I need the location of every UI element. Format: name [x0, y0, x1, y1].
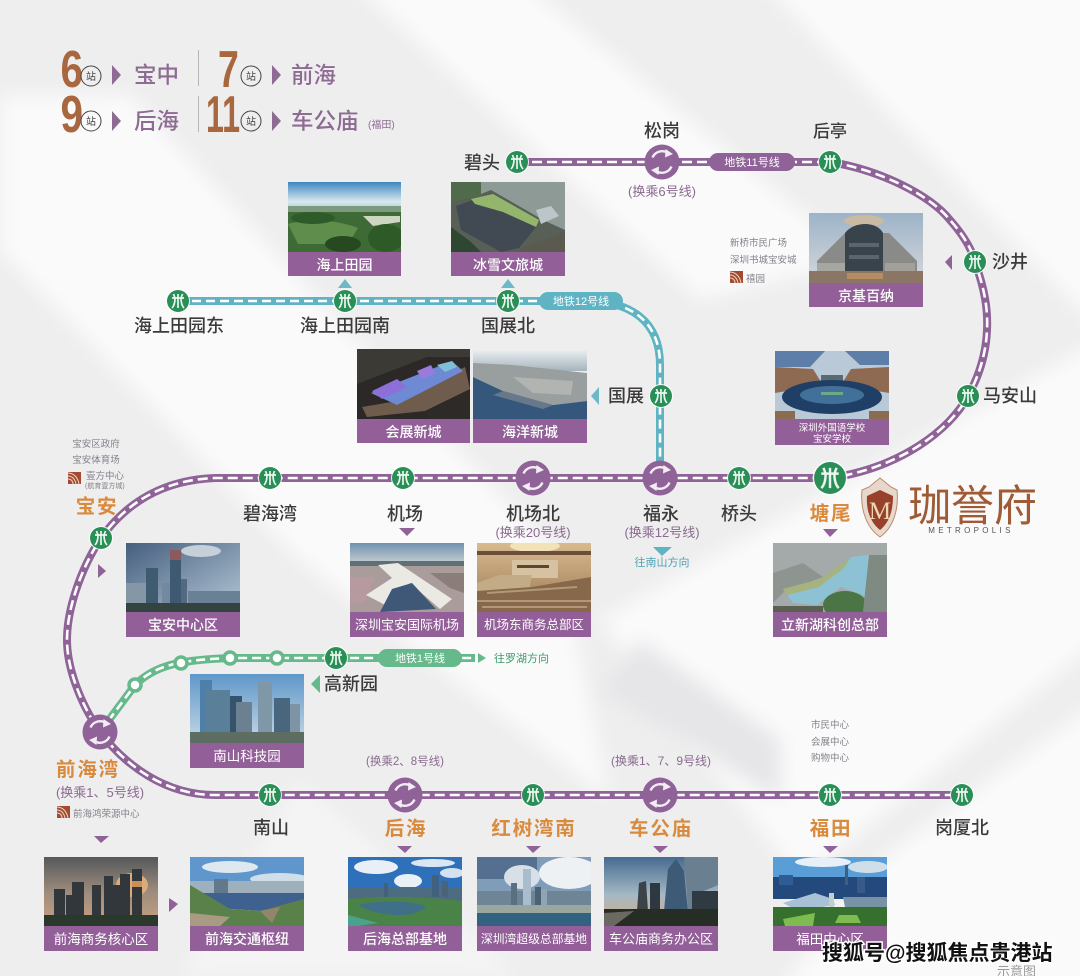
card: 深圳宝安国际机场: 深圳宝安国际机场	[355, 618, 459, 632]
card: 海洋新城	[473, 349, 587, 443]
station labels: 高新园	[324, 674, 378, 694]
card: 京基百纳	[809, 213, 923, 307]
legend row 6 stations: 6	[60, 40, 83, 98]
station labels: 红树湾南	[491, 817, 577, 840]
card: 机场东商务总部区: 机场东商务总部区	[484, 617, 584, 632]
landmark notes: 会展中心	[811, 736, 849, 748]
landmark notes: 深圳书城宝安城	[730, 254, 797, 266]
station labels: 碧头	[464, 153, 500, 173]
card: 深圳外国语学校: 深圳外国语学校	[799, 422, 866, 434]
legend row 7 stations	[218, 40, 336, 98]
station labels: 前海湾	[56, 758, 120, 781]
station labels: 车公庙	[629, 817, 693, 840]
logo shield	[862, 478, 897, 537]
card: 深圳湾超级总部基地: 深圳湾超级总部基地	[481, 932, 587, 946]
station labels	[56, 121, 1037, 840]
legend row 9 stations: 后海	[134, 109, 179, 134]
card: 前海商务核心区: 前海商务核心区	[54, 931, 148, 947]
station labels: 桥头	[721, 504, 757, 524]
station markers	[82, 144, 987, 812]
brand logo: 珈誉府	[908, 483, 1037, 531]
direction label: Nanshan: 往南山方向	[634, 555, 690, 569]
metro line 12	[178, 301, 660, 478]
line 1 label pill	[378, 649, 462, 667]
legend row 6 stations	[60, 40, 179, 98]
station labels: (换乘1、5号线)	[56, 785, 144, 800]
station labels: 国展	[608, 386, 644, 406]
card: 前海商务核心区	[44, 857, 158, 951]
line 11 label pill: 地铁11号线	[724, 155, 780, 169]
landmark notes: 新桥市民广场	[730, 237, 787, 249]
station labels: 国展北	[481, 316, 535, 336]
station labels: 岗厦北	[935, 818, 989, 838]
legend row 6 stations: 站	[86, 70, 96, 83]
legend row 11 stations: 站	[246, 115, 256, 128]
station labels: (换乘2、8号线)	[366, 754, 444, 768]
station labels: 福永	[643, 504, 679, 524]
legend: station counts	[60, 40, 395, 144]
card: 海上田园: 海上田园	[316, 257, 372, 273]
brand logo: METROPOLIS	[928, 526, 1014, 535]
card: 会展新城	[357, 349, 470, 443]
card: 前海交通枢纽: 前海交通枢纽	[205, 931, 289, 947]
station labels: 机场	[387, 504, 423, 524]
landmark notes: 宝安区政府	[72, 438, 120, 450]
station labels: 塘尾	[810, 502, 852, 525]
legend row 11 stations	[206, 86, 395, 144]
card: 会展新城: 会展新城	[386, 424, 442, 440]
station labels: 机场北	[506, 504, 560, 524]
card: 宝安中心区: 宝安中心区	[148, 617, 218, 633]
legend row 6 stations: 宝中	[134, 63, 179, 88]
card: 京基百纳: 京基百纳	[838, 288, 894, 304]
card: 深圳外国语学校: 宝安学校	[813, 433, 851, 445]
station labels: 海上田园东	[134, 316, 224, 336]
station labels: 松岗	[644, 121, 680, 141]
station labels: 海上田园南	[300, 316, 390, 336]
legend row 7 stations: 7	[218, 40, 239, 98]
legend row 9 stations	[60, 85, 179, 143]
legend row 11 stations: 车公庙	[291, 109, 359, 134]
card: 深圳外国语学校	[775, 351, 889, 445]
legend row 11 stations: (福田)	[368, 118, 395, 131]
card: 深圳湾超级总部基地	[477, 857, 599, 951]
direction label: Luohu	[478, 651, 549, 665]
card: 南山科技园: 南山科技园	[213, 749, 281, 764]
station labels: 后海	[385, 818, 427, 840]
line 1 label pill: 地铁1号线	[395, 651, 445, 665]
direction label: Nanshan	[634, 547, 690, 569]
landmark notes: 壹方中心	[86, 470, 125, 482]
brand logo	[862, 478, 1037, 537]
station labels: (换乘6号线)	[628, 184, 696, 199]
station labels: 福田	[810, 818, 852, 840]
station labels: 南山	[253, 818, 289, 838]
landmark notes: 前海鸿荣源中心	[73, 808, 140, 820]
legend row 7 stations: 前海	[291, 63, 336, 88]
direction label: Luohu: 往罗湖方向	[494, 651, 549, 665]
line 12 label pill: 地铁12号线	[553, 294, 609, 308]
legend row 9 stations: 9	[60, 85, 83, 143]
card: 机场东商务总部区	[477, 540, 591, 637]
legend row 7 stations: 站	[246, 70, 256, 83]
card: 海上田园	[288, 182, 404, 276]
card: 后海总部基地	[348, 857, 464, 951]
card: 南山科技园	[190, 674, 304, 768]
station labels: 宝安	[76, 495, 118, 518]
card: 冰雪文旅城	[451, 182, 565, 276]
logo shield: M	[869, 498, 891, 525]
metro line 11	[67, 162, 987, 795]
landmark notes: 购物中心	[811, 752, 849, 764]
landmark notes: (航育壹方城)	[85, 481, 125, 490]
station labels: 碧海湾	[243, 503, 297, 524]
card: 海洋新城: 海洋新城	[502, 424, 558, 440]
card: 立新湖科创总部: 立新湖科创总部	[781, 617, 879, 633]
card: 车公庙商务办公区: 车公庙商务办公区	[609, 932, 713, 946]
station labels: (换乘1、7、9号线)	[611, 754, 711, 768]
station labels: 马安山	[983, 386, 1037, 406]
card: 福田中心区	[773, 857, 888, 951]
landmark notes	[57, 237, 849, 820]
line 11 label pill	[709, 153, 795, 171]
card: 前海交通枢纽	[190, 857, 310, 951]
pointer arrows	[94, 255, 952, 912]
card: 深圳宝安国际机场	[350, 543, 464, 637]
landmark notes: 市民中心	[811, 719, 849, 731]
metro line 1	[100, 658, 475, 732]
landmark notes: 宝安体育场	[72, 454, 120, 466]
station labels: (换乘12号线)	[624, 525, 700, 540]
landmark notes: 禧园	[746, 273, 765, 285]
card: 福田中心区: 福田中心区	[796, 932, 864, 947]
station labels: 后亭	[813, 122, 847, 141]
card: 车公庙商务办公区	[604, 857, 718, 951]
card: 宝安中心区	[126, 543, 240, 637]
watermark: 搜狐号@搜狐焦点贵港站	[822, 942, 1052, 965]
small stations on line 1	[129, 652, 283, 691]
card: 后海总部基地: 后海总部基地	[363, 931, 447, 947]
card: 立新湖科创总部	[773, 543, 887, 637]
station labels: (换乘20号线)	[495, 525, 571, 540]
legend row 9 stations: 站	[86, 115, 96, 128]
legend row 11 stations: 11	[206, 86, 240, 144]
card: 冰雪文旅城: 冰雪文旅城	[473, 257, 543, 273]
line 12 label pill	[539, 292, 623, 310]
station labels: 沙井	[992, 252, 1028, 272]
